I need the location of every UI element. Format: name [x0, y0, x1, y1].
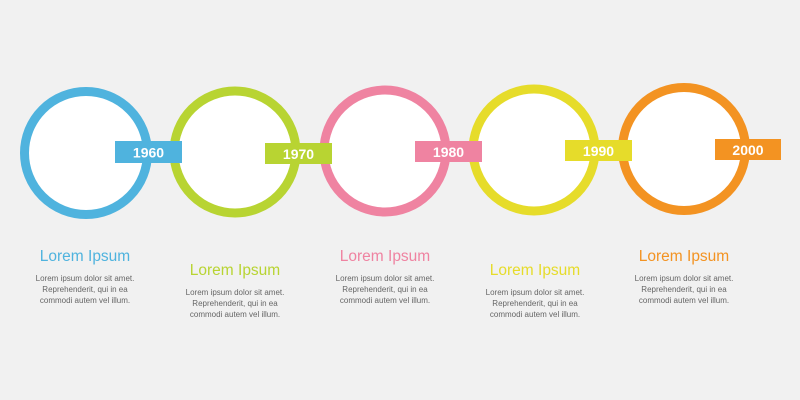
- body text 4: commodi autem vel illum.: [490, 310, 580, 319]
- year label 2000: 2000: [732, 142, 764, 158]
- body text 5: Lorem ipsum dolor sit amet.: [635, 274, 733, 283]
- circle: yellow: [473, 89, 595, 211]
- body text 3: Reprehenderit, qui in ea: [342, 285, 428, 294]
- heading 5: Lorem Ipsum: [639, 248, 729, 265]
- year label 1960: [115, 141, 182, 163]
- year label 1980: 1980: [433, 144, 464, 160]
- heading 4: Lorem Ipsum: [490, 262, 580, 279]
- body text 3: commodi autem vel illum.: [340, 296, 430, 305]
- body text 2: Lorem ipsum dolor sit amet.: [186, 288, 284, 297]
- heading 1: Lorem Ipsum: [40, 248, 130, 265]
- body text 5: commodi autem vel illum.: [639, 296, 729, 305]
- body text 4: Lorem ipsum dolor sit amet.: [486, 288, 584, 297]
- body text 3: Lorem ipsum dolor sit amet.: [336, 274, 434, 283]
- heading 3: Lorem Ipsum: [340, 248, 430, 265]
- year label 1970: [265, 143, 332, 164]
- year label 1960: 1960: [133, 144, 164, 160]
- circles row: [24, 88, 746, 214]
- year label 1990: [565, 140, 632, 161]
- year label 1970: 1970: [283, 146, 314, 162]
- body text 2: Reprehenderit, qui in ea: [192, 299, 278, 308]
- body text 4: Reprehenderit, qui in ea: [492, 299, 578, 308]
- year labels: [115, 139, 781, 164]
- circle: orange: [622, 88, 746, 210]
- year label 1990: 1990: [583, 143, 614, 159]
- body text 1: Lorem ipsum dolor sit amet.: [36, 274, 134, 283]
- circle: green: [174, 91, 296, 213]
- year label 2000: [715, 139, 781, 160]
- year label 1980: [415, 141, 482, 162]
- circle: pink: [324, 90, 446, 212]
- heading 2: Lorem Ipsum: [190, 262, 280, 279]
- body text 5: Reprehenderit, qui in ea: [641, 285, 727, 294]
- body text 1: Reprehenderit, qui in ea: [42, 285, 128, 294]
- body text 2: commodi autem vel illum.: [190, 310, 280, 319]
- body text 1: commodi autem vel illum.: [40, 296, 130, 305]
- circle: blue: [24, 92, 148, 214]
